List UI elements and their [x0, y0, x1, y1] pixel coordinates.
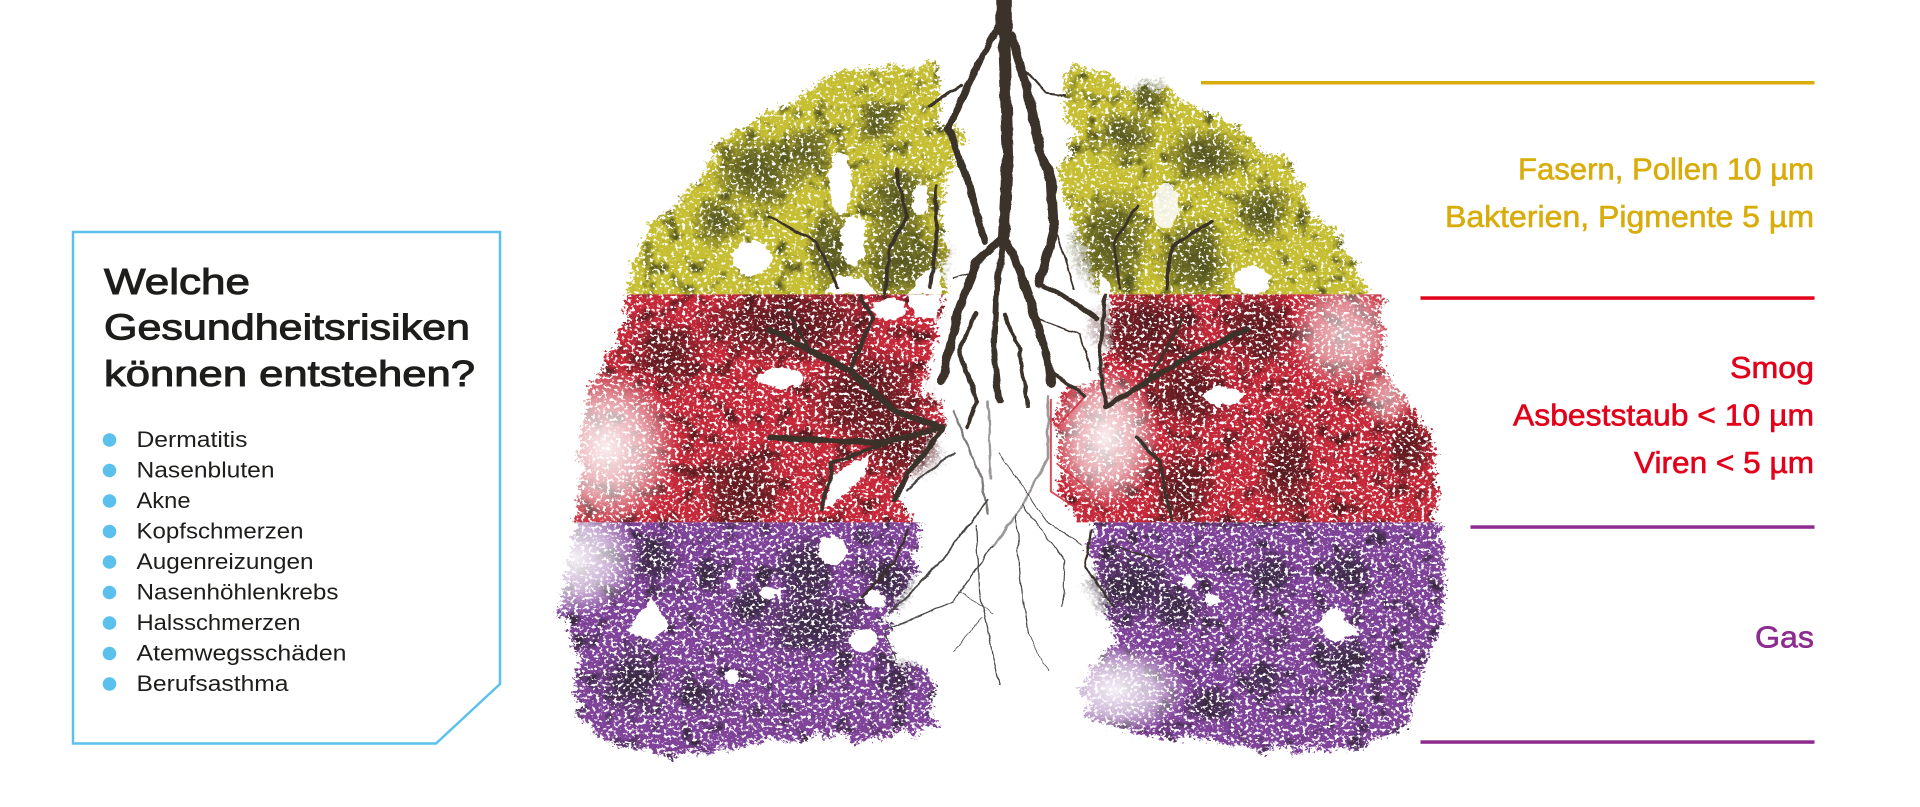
trachea and main bronchi [990, 0, 1018, 31]
yellow band openings [732, 152, 1270, 295]
heading [104, 261, 475, 394]
lower lobe branches [861, 530, 907, 597]
divider: red line [1420, 296, 1814, 300]
label group: yellow particles: Fasern, Pollen 10 µm [1518, 152, 1814, 186]
panel outline with cut corner [73, 232, 500, 744]
list items: Halsschmerzen [136, 610, 300, 635]
lungs illustration: tree-shaped lungs in three coloured bands [508, 0, 1446, 758]
list items: Nasenbluten [136, 458, 274, 482]
list items: Nasenhöhlenkrebs [136, 580, 338, 604]
list items: Kopfschmerzen [136, 518, 304, 544]
label group: red particles: Asbeststaub < 10 µm [1513, 398, 1814, 432]
list items [136, 427, 346, 696]
purple band fades and openings [556, 522, 1359, 734]
red veins at centre of right lung [1051, 396, 1091, 512]
list items: Augenreizungen [136, 549, 314, 574]
bullet dots [103, 433, 116, 691]
list items: Atemwegsschäden [136, 640, 346, 666]
label group: yellow particles [1445, 152, 1814, 234]
secondary bronchi [942, 237, 1004, 381]
heading: Welche [104, 261, 250, 302]
list items: Akne [136, 488, 190, 513]
label group: red particles: Smog [1730, 351, 1814, 385]
divider: purple line [1470, 525, 1814, 529]
divider: yellow top line [1201, 81, 1814, 84]
red band fades and openings [534, 278, 1415, 528]
label group: red particles [1513, 351, 1814, 480]
branches inside lungs [770, 329, 942, 427]
label group: red particles: Viren < 5 µm [1634, 446, 1814, 480]
label: gas: Gas [1755, 620, 1814, 654]
red middle lung band [570, 294, 1442, 522]
list items: Berufsasthma [136, 671, 289, 696]
heading: Gesundheitsrisiken [104, 306, 470, 348]
heading: können entstehen? [104, 353, 475, 394]
list of health risks [103, 427, 346, 696]
list items: Dermatitis [136, 427, 248, 452]
fading lower airways [884, 396, 1082, 685]
panel: health risks [73, 232, 500, 744]
purple lower lung band [553, 522, 1449, 766]
yellow upper lung band [629, 63, 1378, 321]
bronchial tree branches [770, 0, 1246, 685]
divider: purple bottom line [1420, 740, 1814, 744]
label group: yellow particles: Bakterien, Pigmente 5 µm [1445, 200, 1814, 234]
